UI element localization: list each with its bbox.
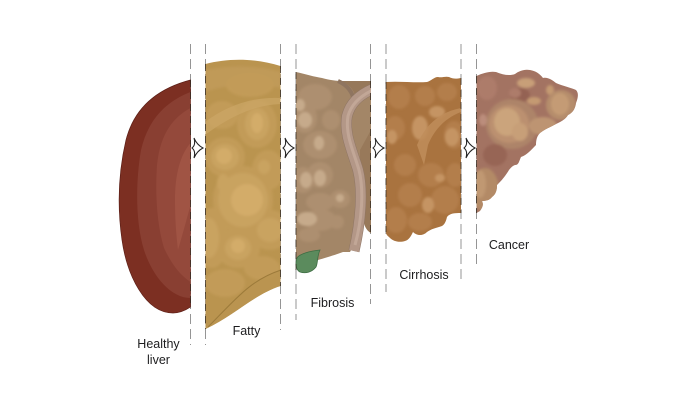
liver progression diagram <box>118 44 578 364</box>
label: cancer: Cancer <box>489 238 529 252</box>
panel: healthy liver <box>119 80 190 313</box>
panel: fatty liver <box>206 60 280 329</box>
label: cirrhosis: Cirrhosis <box>399 268 449 282</box>
dark dashed cut edges <box>190 64 476 329</box>
arrow: healthy to fatty <box>192 138 203 158</box>
vein <box>338 81 375 251</box>
label: fibrosis: Fibrosis <box>311 296 354 310</box>
dashed guide lines <box>190 44 476 345</box>
label: fatty: Fatty <box>233 324 261 338</box>
panel: fibrosis liver <box>292 70 375 273</box>
arrow: fatty to fibrosis <box>283 138 294 158</box>
label: healthy liver: liver <box>147 353 170 367</box>
icon: gallbladder <box>296 250 320 273</box>
panel: cancer liver <box>476 70 578 213</box>
arrow: cirrhosis to cancer <box>464 138 475 158</box>
panel: cirrhosis liver <box>385 76 464 246</box>
label: healthy liver: Healthy <box>137 337 180 351</box>
arrow: fibrosis to cirrhosis <box>373 138 384 158</box>
